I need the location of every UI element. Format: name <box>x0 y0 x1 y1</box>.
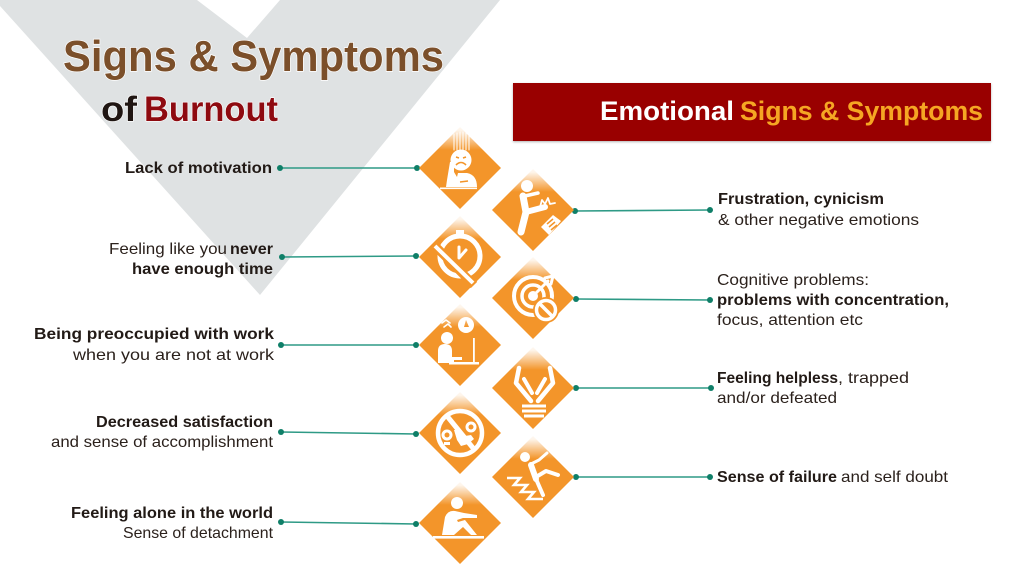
label: feeling helpless: and/or defeated <box>717 390 837 407</box>
title: Burnout <box>144 90 278 129</box>
label: preoccupied with work <box>34 326 275 364</box>
title <box>63 32 444 129</box>
icon: hands around tied lightbulb <box>492 342 574 429</box>
icon: person kicking a box <box>492 164 574 251</box>
label: cognitive problems <box>717 272 949 329</box>
label: preoccupied with work: when you are not at work <box>72 347 275 364</box>
label: frustration: & other negative emotions <box>718 212 919 229</box>
icon: target with arrow and no sign <box>492 252 574 339</box>
icon: crossed out satisfaction symbol <box>419 387 501 474</box>
label: feeling helpless: , trapped <box>838 370 909 387</box>
title: Signs & Symptoms <box>63 32 444 81</box>
label: decreased satisfaction: Decreased satisfaction <box>96 414 273 431</box>
label: never enough time: Feeling like you <box>109 241 227 258</box>
label: lack of motivation: Lack of motivation <box>125 160 272 177</box>
icon: crossed out stopwatch <box>419 211 501 298</box>
label: frustration <box>718 191 919 229</box>
connector lines <box>277 165 714 527</box>
icon: person with head on hand <box>419 122 501 209</box>
icon: person working at laptop <box>419 299 501 386</box>
label: sense of failure: and self doubt <box>841 469 949 486</box>
label: decreased satisfaction: and sense of accomplishment <box>51 434 274 451</box>
banner: Emotional Signs & Symptoms <box>513 83 991 141</box>
label: feeling helpless: Feeling helpless <box>717 370 838 387</box>
label: preoccupied with work: Being preoccupied with work <box>34 326 274 343</box>
label: feeling alone <box>71 505 274 542</box>
label: never enough time: never <box>230 241 273 258</box>
label: frustration: Frustration, cynicism <box>718 191 884 208</box>
banner: Emotional Signs & Symptoms: Signs & Symptoms <box>740 96 983 126</box>
icon: person falling down stairs <box>492 431 574 518</box>
label: never enough time: have enough time <box>132 261 273 278</box>
label: feeling alone: Sense of detachment <box>123 525 274 542</box>
icon: person sitting alone <box>419 477 501 564</box>
label: feeling alone: Feeling alone in the world <box>71 505 273 522</box>
label: cognitive problems: focus, attention etc <box>717 312 863 329</box>
title: of <box>101 90 137 129</box>
label: never enough time <box>109 241 273 278</box>
label: cognitive problems: Cognitive problems: <box>717 272 869 289</box>
banner: Emotional Signs & Symptoms: Emotional <box>600 96 734 126</box>
label: sense of failure: Sense of failure <box>717 469 837 486</box>
background V shape <box>0 0 500 295</box>
label: cognitive problems: problems with concentration, <box>717 292 949 309</box>
label: decreased satisfaction <box>51 414 274 451</box>
label: feeling helpless <box>717 370 909 407</box>
label: sense of failure <box>717 469 949 486</box>
